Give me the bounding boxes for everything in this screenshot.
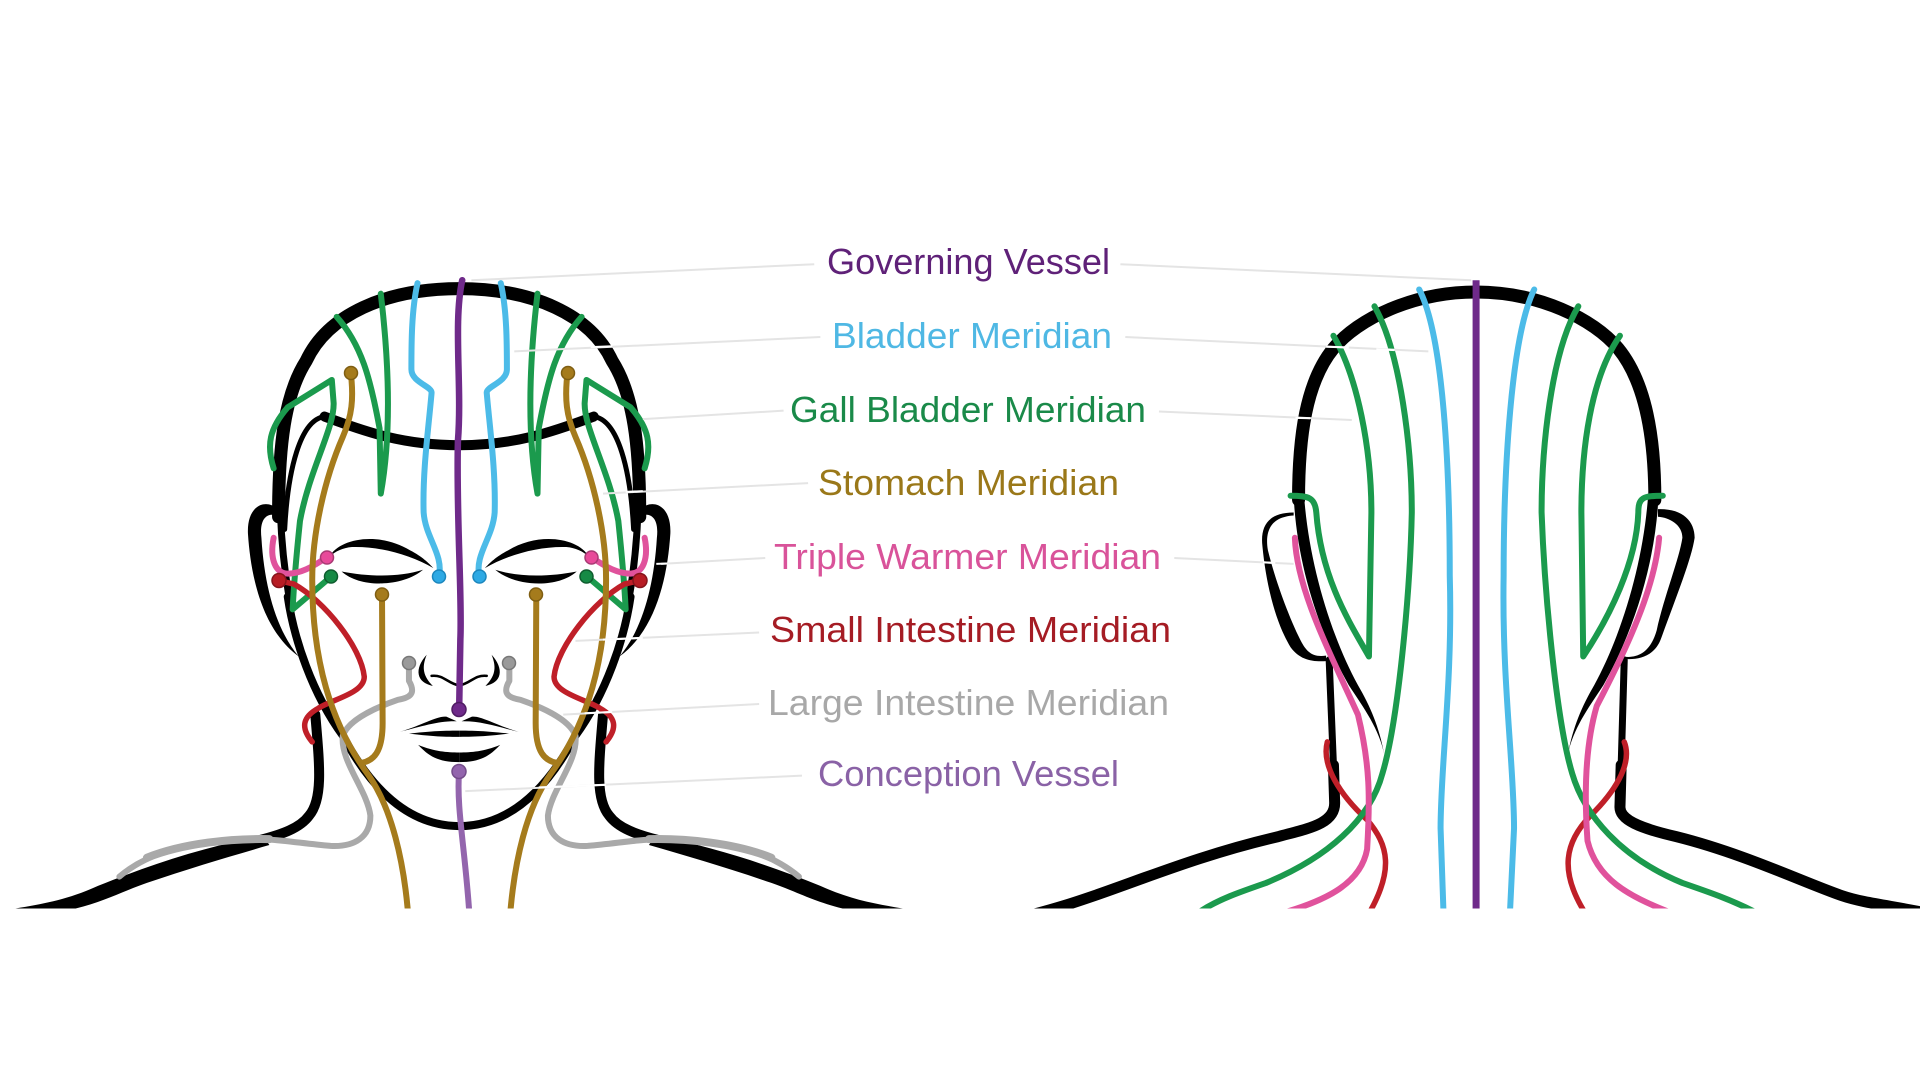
- label: Conception Vessel: Conception Vessel: [818, 753, 1119, 794]
- front meridian paths: [119, 280, 799, 917]
- front head outline: [12, 289, 906, 909]
- label: Bladder Meridian: Bladder Meridian: [832, 315, 1112, 356]
- label: Governing Vessel: Governing Vessel: [827, 241, 1110, 282]
- acupoint markers: [272, 366, 647, 778]
- label: Large Intestine Meridian: Large Intestine Meridian: [768, 682, 1169, 723]
- figure: back view of head: [1021, 280, 1920, 917]
- back head outline: [1021, 292, 1920, 917]
- figure: front view of head: [12, 280, 906, 917]
- leader lines: [465, 264, 1471, 791]
- label: Stomach Meridian: Stomach Meridian: [818, 462, 1119, 503]
- label: Gall Bladder Meridian: Gall Bladder Meridian: [790, 389, 1146, 430]
- label: Triple Warmer Meridian: Triple Warmer Meridian: [774, 536, 1161, 577]
- label: Small Intestine Meridian: Small Intestine Meridian: [770, 609, 1171, 650]
- back meridian paths: [1199, 280, 1756, 917]
